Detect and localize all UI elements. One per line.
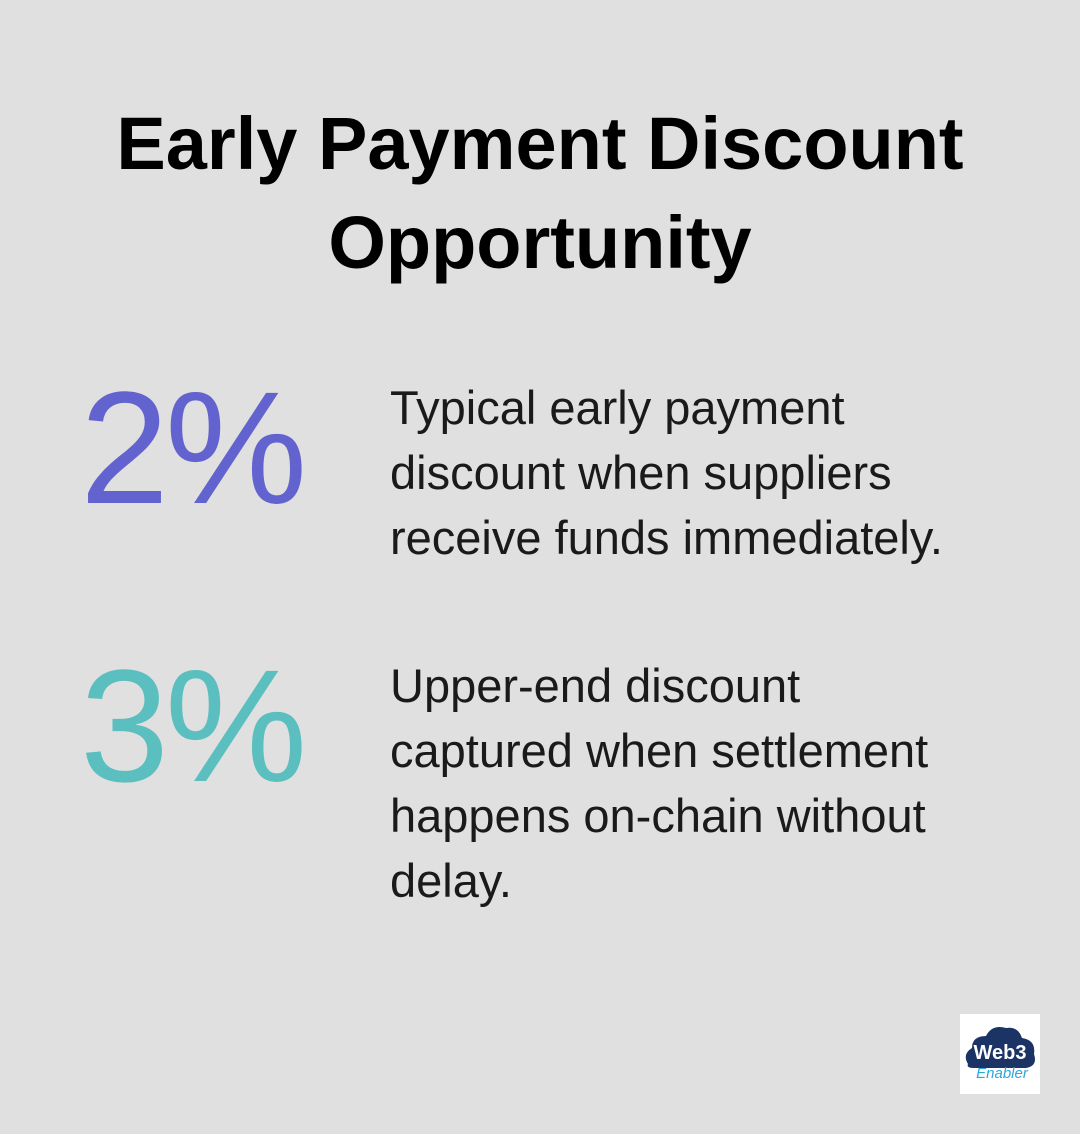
stat: 3%: 3%: [80, 636, 303, 815]
text: 3% description: [390, 659, 928, 907]
logo: Web3 Enabler: Web3: [974, 1042, 1026, 1064]
title: Early Payment Discount: [116, 102, 964, 185]
text: 2% description: [390, 381, 943, 564]
logo: Web3 Enabler: [960, 1014, 1040, 1094]
text: 2% description: receive funds immediately.: [390, 511, 943, 564]
text: 2% description: discount when suppliers: [390, 446, 892, 499]
logo: Web3 Enabler: Enabler: [976, 1065, 1029, 1082]
title: Opportunity: [328, 201, 752, 284]
text: 3% description: happens on-chain without: [390, 789, 926, 842]
stat: 2%: 2%: [80, 358, 303, 537]
text: 3% description: delay.: [390, 854, 512, 907]
text: 3% description: captured when settlement: [390, 724, 928, 777]
text: 3% description: Upper-end discount: [390, 659, 800, 712]
title: [116, 102, 964, 284]
text: 2% description: Typical early payment: [390, 381, 845, 434]
